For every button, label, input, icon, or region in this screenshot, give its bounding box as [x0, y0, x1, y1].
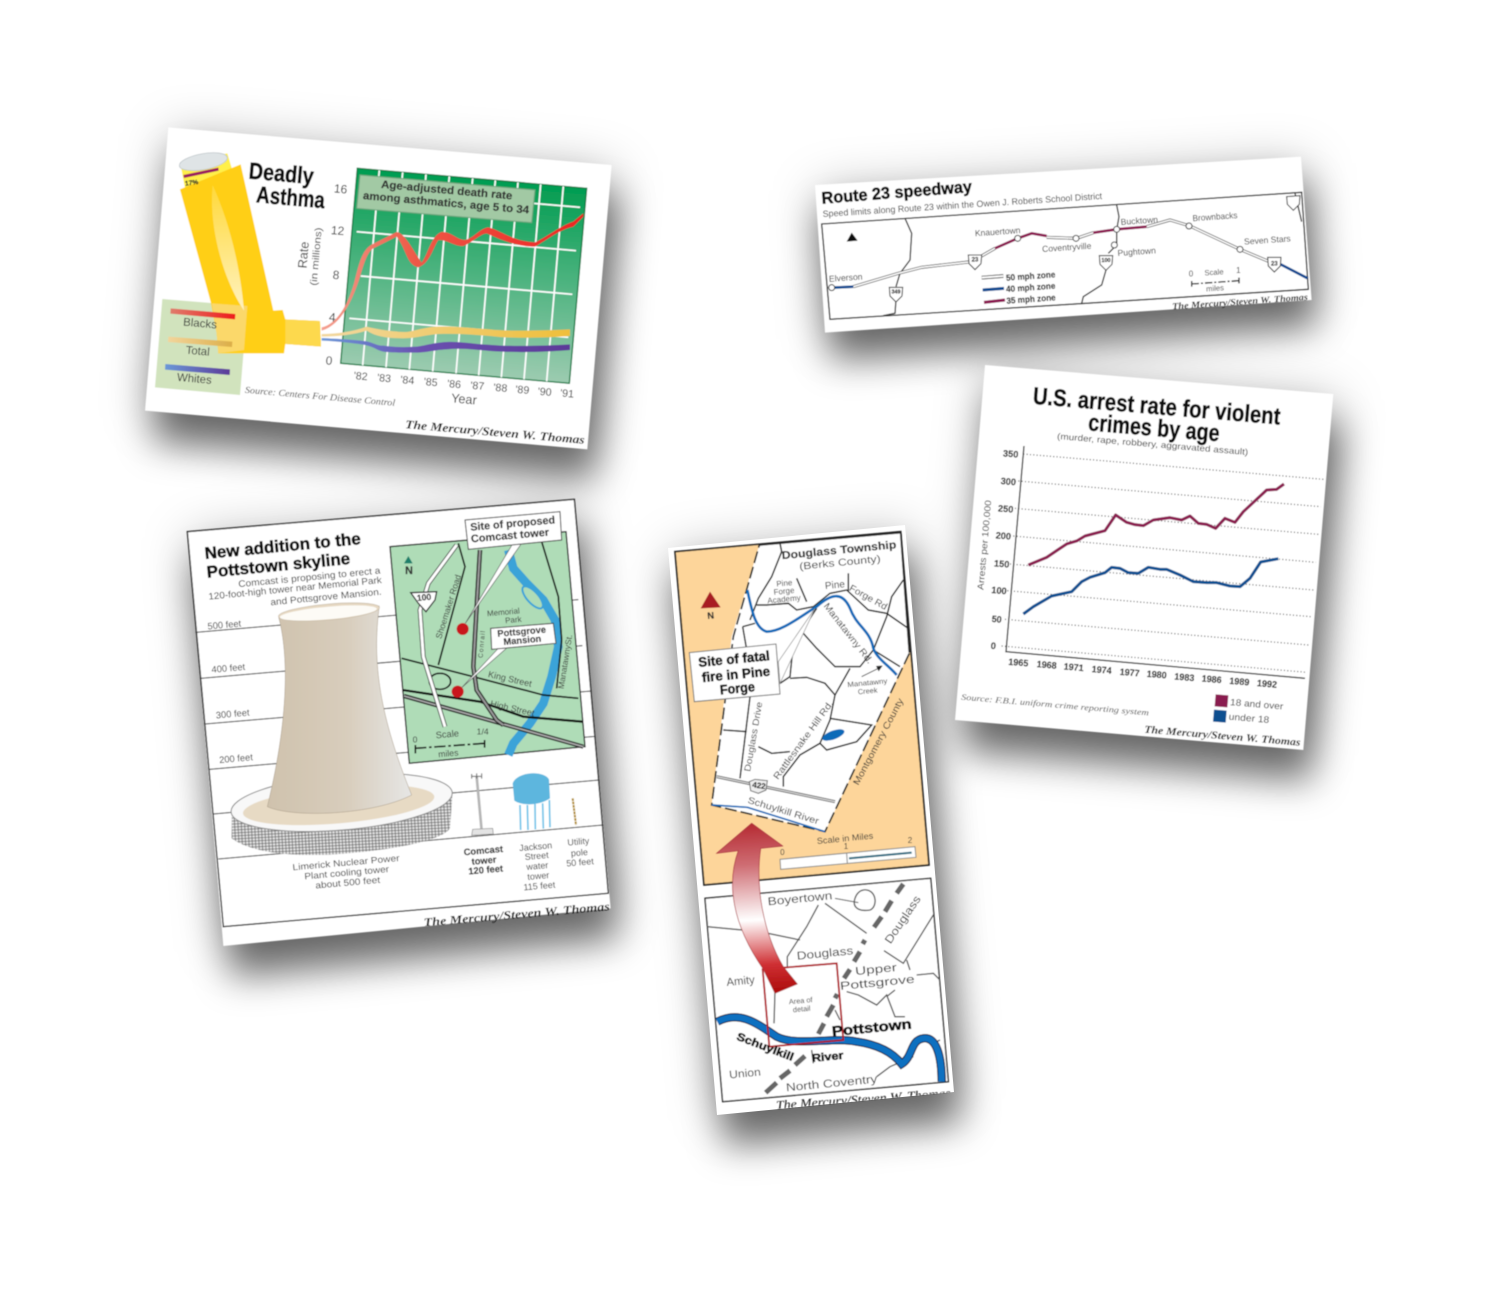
callout: Pottsgrove Mansion: Mansion	[503, 634, 542, 647]
place labels: Pughtown	[1117, 245, 1156, 258]
subtitle: Speed limits along Route 23 within the Owen J. Roberts School District	[822, 191, 1103, 219]
locator labels: Pottstown	[831, 1016, 912, 1039]
axis labels: '91	[560, 387, 575, 401]
illustration: cooling tower: Plant cooling tower	[304, 864, 389, 881]
x axis labels: 1983	[1174, 672, 1195, 683]
legend: speed zones	[982, 269, 1056, 306]
y axis labels: 100	[991, 585, 1007, 596]
callout: Pottsgrove Mansion: Pottsgrove	[497, 625, 546, 639]
map labels: Douglass Township	[781, 539, 897, 562]
height scale lines: 500 feet	[207, 619, 242, 631]
icon: north arrow: N	[707, 610, 715, 621]
locator labels: Schuylkill	[735, 1031, 795, 1064]
height scale lines: 400 feet	[211, 662, 246, 675]
axis labels	[296, 181, 575, 407]
map labels: Manatawny	[847, 676, 888, 689]
icon: north arrow	[701, 592, 721, 621]
intro text: Comcast is proposing to erect a	[238, 565, 382, 589]
axis labels: '90	[537, 386, 552, 399]
heading: New addition to the Pottstown skyline: New addition to the	[204, 529, 362, 563]
height scale lines: 300 feet	[215, 708, 250, 720]
x axis labels: 1968	[1036, 659, 1057, 671]
highway	[766, 884, 903, 1093]
axis labels: '82	[353, 370, 368, 383]
place labels	[829, 210, 1292, 284]
tower labels: water	[525, 860, 549, 872]
height scale lines: 200 feet	[219, 752, 254, 765]
map labels: Montgomery County	[851, 696, 906, 787]
illustration: cooling tower: Limerick Nuclear Power	[292, 853, 400, 872]
locator labels: River	[811, 1050, 845, 1065]
map: proposed tower site: Shoemaker Road	[434, 573, 463, 640]
locator labels: North Coventry	[785, 1074, 878, 1094]
map: Pottstown locator	[705, 823, 951, 1112]
intro text: and Pottsgrove Mansion.	[270, 587, 382, 607]
panel: Pine Forge fire map	[668, 525, 954, 1115]
illustration: cooling tower: about 500 feet	[315, 875, 381, 890]
place labels: Coventryville	[1042, 241, 1092, 254]
scale bar: 1	[844, 842, 849, 851]
map: proposed tower site: High Street	[489, 698, 536, 718]
x axis labels: 1992	[1257, 678, 1277, 690]
tower labels	[463, 836, 595, 892]
map: Route 23: 349	[892, 290, 900, 296]
y axis labels: 250	[998, 503, 1014, 515]
map: Route 23: 100	[1102, 258, 1110, 264]
axis labels: '87	[470, 380, 485, 393]
creek	[747, 590, 897, 675]
axis labels: '89	[515, 384, 530, 397]
map: proposed tower site: Park	[505, 615, 522, 625]
callout: Site of fatal fire: Site of fatal	[698, 648, 770, 670]
map labels: 422	[752, 780, 767, 791]
map: proposed tower site: ManatawnySt.	[556, 634, 574, 690]
callout: Site of fatal fire	[689, 608, 815, 702]
map: Route 23	[822, 192, 1308, 319]
icon: asthma inhaler: 17%	[185, 179, 199, 188]
x axis labels: 1989	[1229, 676, 1250, 687]
byline: The Mercury/Steven W. Thomas	[1144, 725, 1301, 749]
area of detail box	[763, 963, 843, 1047]
tower labels: Utility	[567, 836, 590, 848]
place labels: Seven Stars	[1244, 233, 1292, 247]
axis labels: Year	[451, 391, 477, 407]
axis labels: Rate	[296, 241, 312, 269]
axis labels: '86	[447, 378, 462, 391]
map: Route 23: 23	[1271, 261, 1278, 267]
axis labels: 8	[332, 268, 340, 282]
axis labels: 4	[328, 310, 337, 325]
map: proposed tower site: King Street	[487, 669, 533, 689]
tower labels: tower	[471, 855, 497, 867]
map labels: Pine	[825, 579, 846, 592]
heading: Deadly Asthma: Deadly	[248, 158, 315, 189]
legend: speed zones: 35 mph zone	[1006, 292, 1056, 306]
place labels: Brownbacks	[1192, 210, 1238, 223]
tower labels: Street	[524, 850, 550, 862]
legend: Whites	[177, 372, 212, 387]
map labels: (Berks County)	[799, 554, 881, 573]
source note: Source: F.B.I. uniform crime reporting system	[961, 693, 1149, 717]
locator labels: Douglass	[796, 945, 854, 963]
heading: New addition to the Pottstown skyline: Pottstown skyline	[206, 549, 351, 582]
legend: speed zones: 50 mph zone	[1006, 269, 1056, 283]
tower labels: 50 feet	[566, 856, 595, 869]
callout: Pottsgrove Mansion	[491, 623, 556, 649]
illustration: cooling tower	[229, 600, 455, 890]
axis labels: 12	[330, 223, 345, 238]
heading: Deadly Asthma: Asthma	[255, 181, 327, 213]
map labels: Creek	[857, 686, 878, 696]
map scale: Scale	[435, 728, 459, 740]
line chart: arrests per 100,000	[975, 446, 1323, 690]
intro text: 120-foot-high tower near Memorial Park	[208, 575, 382, 602]
map: proposed tower site: Memorial	[487, 606, 520, 618]
x axis labels: 1980	[1146, 669, 1167, 680]
x axis labels: 1977	[1119, 667, 1140, 678]
scale bar: Scale in Miles	[816, 831, 874, 846]
map: proposed tower site: Conrail	[478, 630, 487, 658]
area of detail box: detail	[793, 1004, 811, 1014]
heading: U.S. arrest rate	[1032, 383, 1282, 447]
panel: Deadly Asthma chart	[145, 127, 612, 449]
arrow: to detail map	[717, 823, 797, 993]
heading: New addition to the Pottstown skyline	[204, 529, 362, 582]
axis labels: '84	[400, 374, 415, 387]
map labels: Douglass Drive	[742, 701, 764, 772]
map labels: Schuylkill River	[746, 795, 820, 826]
axis labels: '88	[493, 382, 508, 395]
map: Route 23: 23	[972, 257, 979, 263]
x axis labels	[1008, 657, 1277, 690]
locator labels: Boyertown	[767, 890, 833, 908]
legend: speed zones: 40 mph zone	[1006, 281, 1056, 294]
locator labels: Pottsgrove	[839, 974, 915, 993]
x axis labels: 1971	[1063, 662, 1084, 673]
callout: Site of fatal fire: Forge	[719, 679, 755, 697]
heading: U.S. arrest rate: U.S. arrest rate for violent	[1032, 383, 1282, 431]
panel: U.S. arrest rate chart	[955, 365, 1333, 750]
subtitle: (murder, rape, robbery, aggravated assault)	[1057, 431, 1249, 457]
legend	[165, 308, 235, 387]
byline: The Mercury/Steven W. Thomas	[1172, 293, 1309, 312]
map scale: 1/4	[477, 727, 489, 737]
height scale lines	[196, 600, 603, 859]
heading: U.S. arrest rate: crimes by age	[1087, 409, 1221, 447]
y axis labels: 50	[991, 614, 1002, 625]
panel: Pottstown skyline	[187, 499, 611, 946]
map labels: Forge	[773, 586, 795, 597]
icon: water tower	[513, 773, 550, 830]
map labels: Manatawny Rd.	[822, 601, 875, 666]
series: Whites	[322, 338, 570, 353]
tower labels: tower	[527, 870, 550, 882]
scale bar	[1189, 266, 1241, 293]
tower labels: Comcast	[463, 844, 503, 857]
series: under 18	[1023, 559, 1278, 614]
icon: north arrow	[404, 556, 413, 577]
y axis labels: 0	[990, 641, 996, 651]
map: proposed tower site	[390, 512, 585, 763]
axis labels: '83	[377, 372, 392, 385]
y axis labels: 350	[1003, 448, 1019, 460]
axis labels: 0	[325, 353, 333, 368]
legend: under 18	[1228, 712, 1270, 725]
locator labels: Douglass	[883, 894, 924, 946]
callout: Site of proposed Comcast tower: Comcast tower	[470, 527, 550, 545]
map scale	[413, 727, 489, 759]
map scale: miles	[438, 747, 459, 759]
line chart: death rate	[296, 168, 587, 407]
map: Douglass Township detail	[675, 532, 929, 885]
icon: asthma inhaler	[178, 150, 321, 353]
place labels: Elverson	[829, 271, 863, 284]
axis labels: (in millions)	[309, 227, 325, 286]
series: Total	[322, 327, 570, 338]
legend: Blacks	[183, 317, 218, 331]
x axis labels: 1986	[1201, 674, 1222, 685]
legend: Total	[185, 345, 210, 359]
scale bar: miles	[1206, 283, 1224, 293]
locator labels: Union	[729, 1067, 761, 1081]
callout: Site of proposed Comcast tower: Site of proposed	[470, 514, 556, 534]
map scale: 0	[413, 734, 418, 744]
callout: Site of fatal fire: fire in Pine	[701, 664, 771, 685]
intro text	[208, 565, 382, 607]
locator labels	[726, 890, 924, 1094]
y axis labels	[975, 448, 1019, 651]
locator labels: Upper	[855, 962, 898, 978]
icon: route 100 shield	[411, 592, 437, 612]
map labels	[742, 539, 906, 826]
map labels: Pine	[776, 578, 793, 589]
series: Blacks	[322, 213, 583, 331]
icon: north arrow: N	[405, 565, 413, 577]
tower labels: 120 feet	[468, 864, 503, 876]
scale bar: Scale	[1204, 267, 1224, 277]
y axis labels: 150	[994, 558, 1010, 570]
y axis labels: Arrests per 100,000	[975, 500, 993, 590]
legend: 18 and over	[1230, 697, 1284, 712]
map labels: Rattlesnake Hill Rd.	[771, 699, 835, 781]
place labels: Bucktown	[1120, 214, 1158, 227]
scale bar: 1	[1236, 266, 1241, 275]
chart title box	[357, 175, 535, 223]
byline: The Mercury/Steven W. Thomas	[423, 900, 611, 929]
source note: Source: Centers For Disease Control	[245, 386, 396, 409]
panel: Route 23 speedway	[815, 157, 1312, 333]
area of detail box: Area of	[788, 995, 814, 1006]
heading: Route 23 speedway: Route 23 speedway	[821, 177, 973, 208]
locator labels: Amity	[726, 974, 756, 989]
tower labels: 115 feet	[523, 880, 556, 892]
icon: Comcast tower	[472, 773, 493, 835]
x axis labels: 1965	[1008, 657, 1029, 668]
scale bar: 0	[780, 848, 785, 857]
route shields	[889, 196, 1300, 302]
x axis labels: 1974	[1091, 664, 1113, 676]
legend	[1213, 694, 1284, 725]
tower labels: Jackson	[519, 840, 553, 853]
scale bar: 0	[1189, 269, 1194, 278]
tower labels: pole	[570, 847, 588, 858]
icon: utility pole	[573, 798, 576, 825]
icon: route 100 shield: 100	[416, 592, 432, 603]
y axis labels: 300	[1000, 476, 1016, 487]
scale bar: 2	[908, 836, 913, 845]
chart title box: among asthmatics, age 5 to 34	[362, 190, 530, 217]
series: 18 and over	[1028, 484, 1284, 565]
chart title box: Age-adjusted death rate	[381, 179, 513, 202]
heading: Deadly Asthma	[248, 158, 327, 213]
map labels: Forge Rd	[848, 583, 889, 612]
byline: The Mercury/Steven W. Thomas	[776, 1086, 951, 1112]
axis labels: '85	[423, 376, 438, 389]
y axis labels: 200	[995, 530, 1011, 542]
byline: The Mercury/Steven W. Thomas	[405, 417, 586, 447]
Schuylkill River	[717, 1017, 942, 1082]
map labels: Academy	[767, 593, 801, 605]
scale bar	[780, 831, 916, 869]
place labels: Knauertown	[975, 225, 1021, 238]
axis labels: 16	[333, 181, 348, 197]
callout: Site of proposed Comcast tower	[465, 512, 562, 549]
